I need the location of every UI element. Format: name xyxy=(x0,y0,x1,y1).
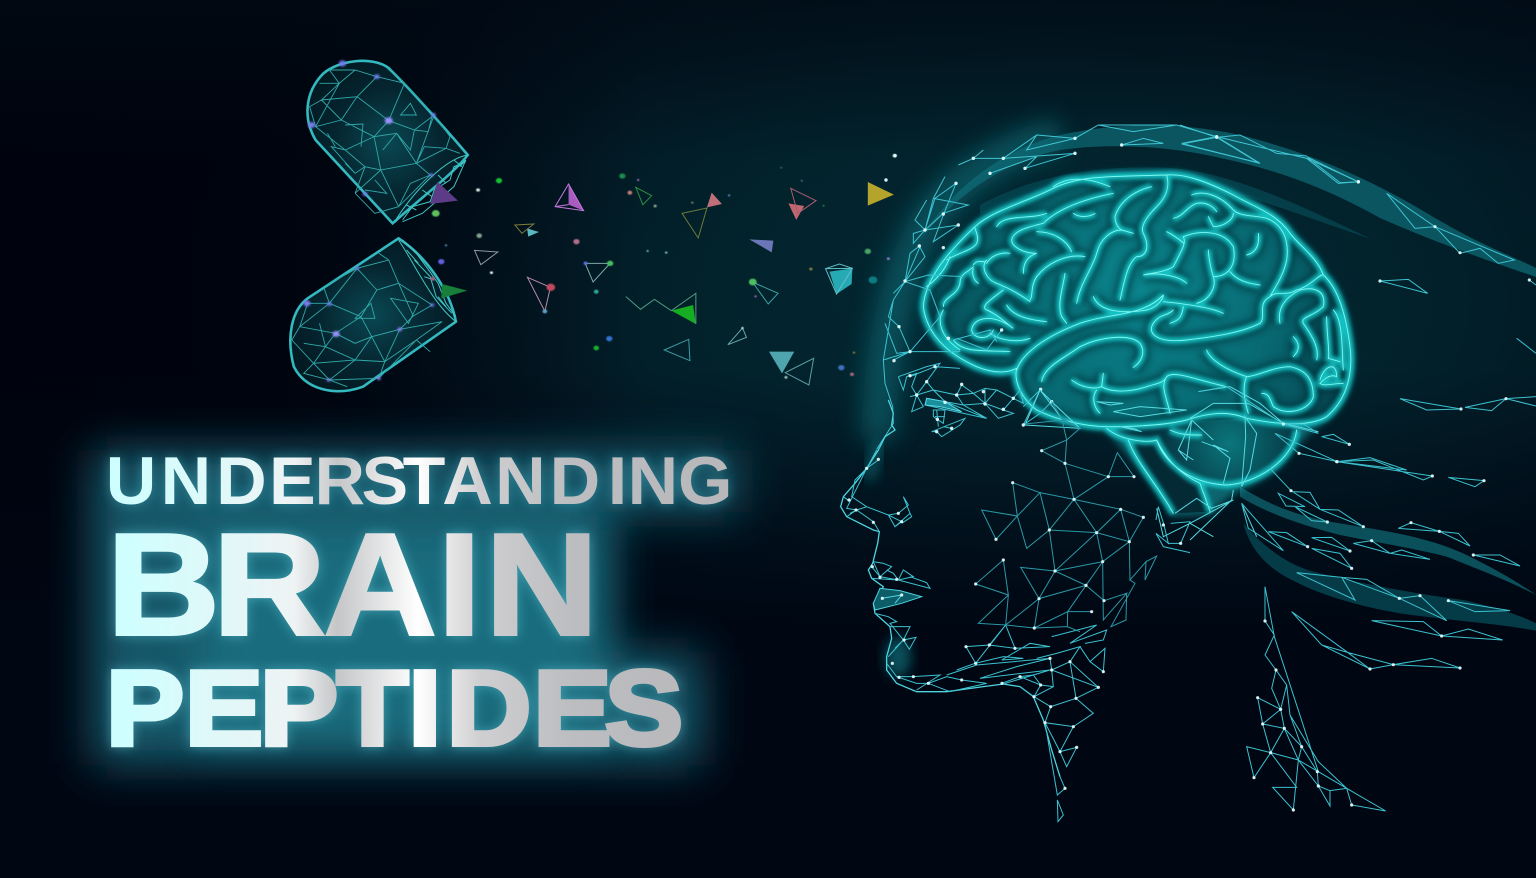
right hair strands lower and back of neck xyxy=(1242,460,1520,811)
jaw strands xyxy=(947,625,1107,684)
cheek mesh xyxy=(976,402,1157,632)
right hair strands upper xyxy=(1180,125,1536,470)
peptide fragments xyxy=(430,154,897,385)
sulci glow xyxy=(923,175,1351,513)
capsule: bottom half xyxy=(290,238,456,391)
face profile xyxy=(841,400,1060,777)
hair top mesh xyxy=(958,125,1358,183)
sulci lines xyxy=(923,175,1351,513)
filled triangles xyxy=(430,182,894,373)
lower hair band B xyxy=(1243,523,1536,631)
brain stem xyxy=(1128,440,1210,513)
heading: brain: BRAIN xyxy=(107,503,598,665)
nose mesh xyxy=(843,450,912,532)
capsule: top half xyxy=(307,60,468,223)
glowing dots xyxy=(430,154,897,379)
upper hair band xyxy=(920,125,1536,277)
title xyxy=(106,443,732,767)
cerebellum xyxy=(1107,416,1297,485)
title text glow: BRAIN xyxy=(107,503,598,665)
title text glow: UNDERSTANDING xyxy=(106,443,732,519)
back of neck mesh xyxy=(1247,587,1386,811)
lower face mesh xyxy=(841,400,1190,822)
heading: understanding: UNDERSTANDING xyxy=(106,443,732,519)
brain outer halo xyxy=(923,175,1351,513)
title glow xyxy=(92,450,738,765)
forehead and face halo xyxy=(868,135,1060,677)
chin mesh xyxy=(875,613,987,692)
upper head mesh xyxy=(877,156,1052,449)
lips mesh xyxy=(872,562,930,588)
hair strands xyxy=(1242,460,1520,669)
lower hair band A xyxy=(1240,487,1536,595)
eye mesh xyxy=(932,410,965,437)
nape mesh xyxy=(1156,507,1190,553)
neck mesh xyxy=(1002,658,1098,822)
heading: peptides: PEPTIDES xyxy=(106,648,683,767)
title text glow: PEPTIDES xyxy=(106,648,683,767)
outlined triangles xyxy=(474,184,852,385)
brain hemisphere fill xyxy=(923,175,1351,427)
forehead outline mesh xyxy=(877,177,968,449)
upper hair lower lobe xyxy=(980,167,1371,239)
sulci dark shading xyxy=(925,176,1348,426)
brow and temple mesh xyxy=(898,330,1052,425)
title text glow xyxy=(106,443,732,767)
brain xyxy=(923,175,1351,513)
brain overlay mesh xyxy=(1025,387,1318,540)
hair bands xyxy=(920,125,1536,631)
